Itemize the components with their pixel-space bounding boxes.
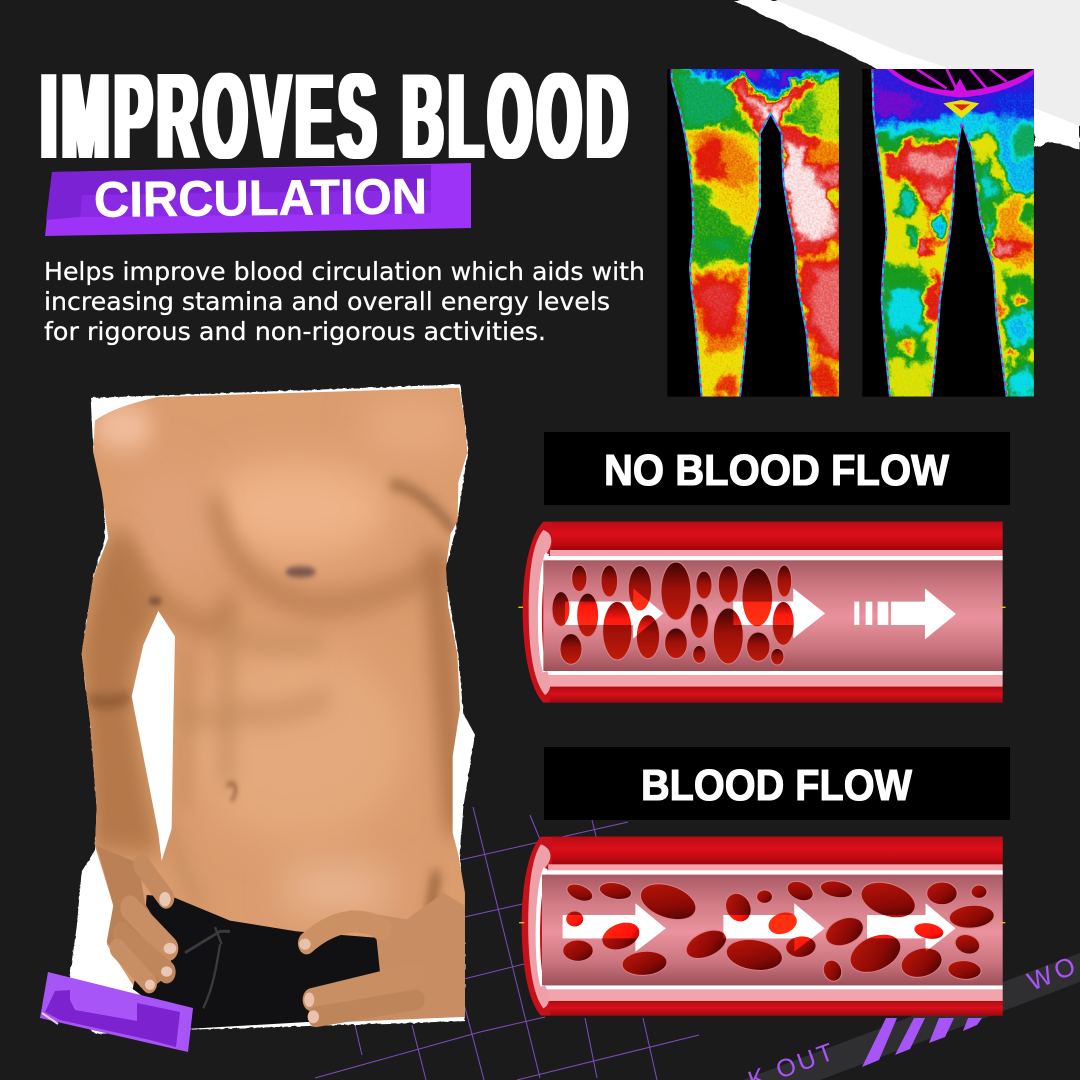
- arrow overlay on cells: [565, 588, 825, 638]
- red blood cells: [552, 562, 794, 665]
- red blood cells: [563, 875, 995, 983]
- description text: Helps improve blood circulation which aids with: [44, 257, 645, 286]
- flow arrows: [563, 903, 955, 952]
- nails: [299, 939, 319, 1023]
- vessel opening: [528, 844, 550, 1008]
- right hand: [299, 893, 465, 1023]
- shading: [80, 397, 470, 914]
- torn white backing: [63, 384, 475, 1034]
- left hand: [97, 846, 176, 990]
- label: no blood flow: NO BLOOD FLOW: [604, 446, 949, 495]
- black shorts: [133, 895, 397, 1029]
- vessel: blood flow: [519, 837, 1005, 1016]
- nipples and navel: [285, 566, 316, 577]
- purple slashes: [862, 1018, 982, 1067]
- description text: increasing stamina and overall energy levels: [44, 287, 610, 316]
- label: blood flow: BLOOD FLOW: [641, 761, 912, 810]
- arrow overlay on cells: [563, 903, 955, 952]
- description text: [44, 257, 645, 346]
- flow arrows: [565, 588, 956, 639]
- subtitle banner: [45, 163, 471, 236]
- nails: [145, 892, 176, 990]
- yellow ticks: [518, 605, 1006, 609]
- title: IMPROVES BLOOD: [41, 49, 633, 185]
- photo: torso on torn paper: [63, 380, 477, 1034]
- subtitle text: CIRCULATION: [94, 168, 427, 228]
- white gaps: [132, 611, 175, 861]
- thermal image: right legs: [862, 69, 1034, 397]
- vessel: no blood flow: [518, 522, 1006, 703]
- label: no blood flow: [544, 432, 1010, 505]
- skin: [63, 380, 477, 1030]
- vessel walls: [523, 522, 1003, 703]
- thermal image: left legs: [667, 69, 839, 397]
- torn paper corner: [733, 0, 1080, 150]
- description text: for rigorous and non-rigorous activities.: [44, 317, 546, 346]
- purple grid lines: [315, 807, 699, 1080]
- yellow ticks: [519, 921, 1005, 925]
- purple tape sticker: [40, 972, 193, 1052]
- top dark arcs: [887, 69, 1034, 97]
- drawstring: [185, 927, 230, 1008]
- leg outline: [672, 69, 812, 397]
- label: blood flow: [544, 747, 1010, 820]
- vessel opening: [529, 530, 551, 695]
- vessel walls: [522, 837, 1003, 1016]
- leg outline: [872, 69, 1007, 397]
- diagonal strip with text: [743, 953, 1080, 1080]
